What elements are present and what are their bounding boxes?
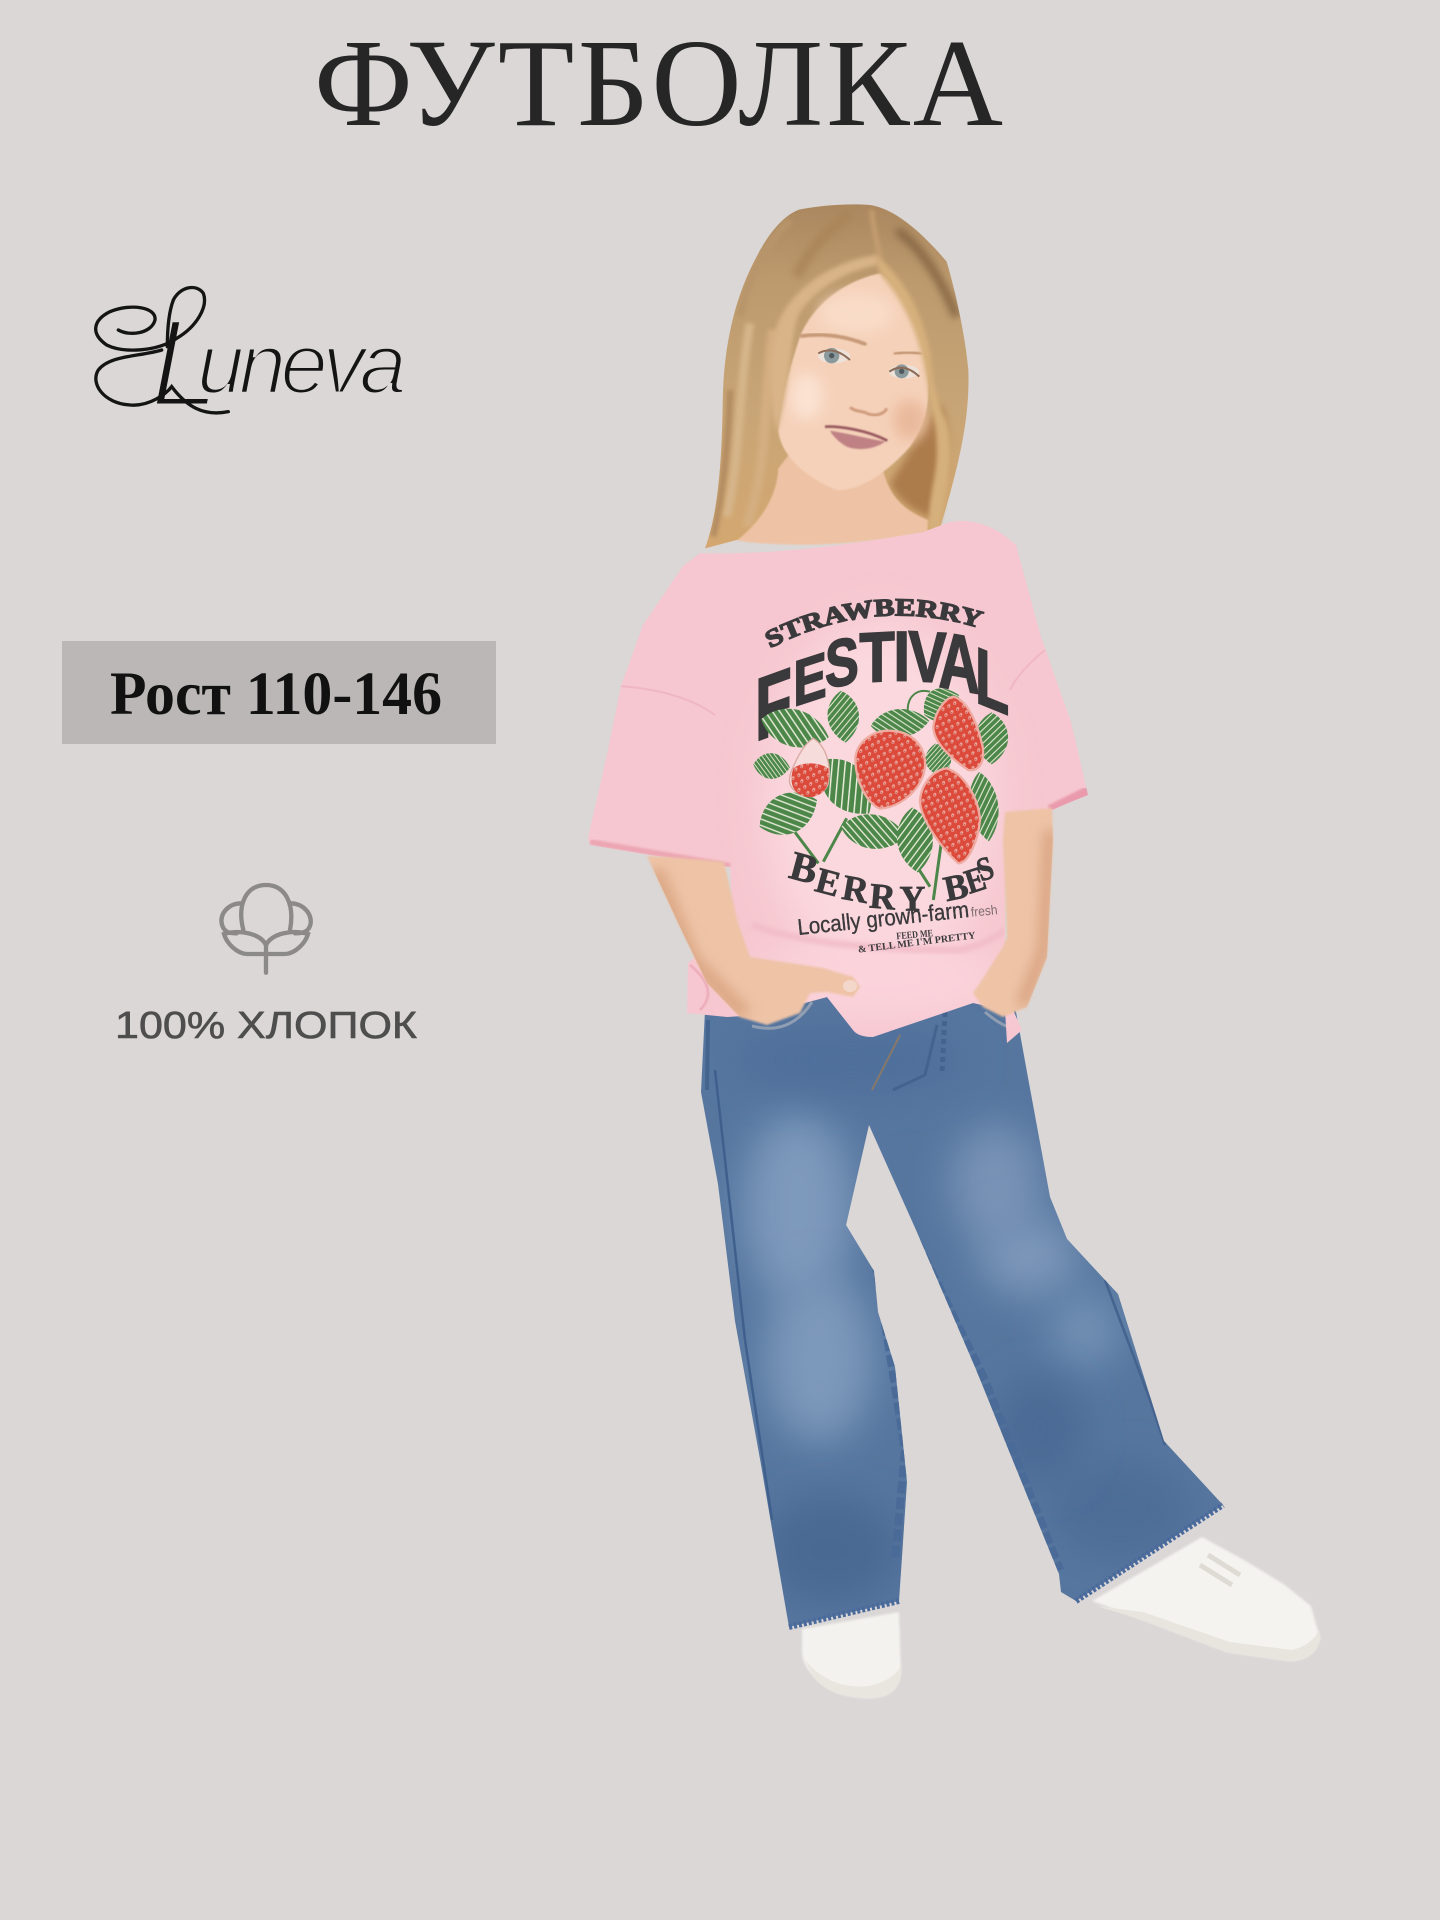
brand logo: uneva [197,317,404,412]
print heading: festival: T [859,616,895,698]
strawberry: upper right [933,697,983,770]
t-shirt print [753,598,1009,956]
hair front strands [770,255,951,532]
height badge [62,641,496,744]
material label: 100% ХЛОПОК [115,1005,417,1047]
print heading: festival: F [755,649,792,761]
print heading: festival: L [975,631,1009,734]
strawberry leaves [751,680,1008,874]
print tagline: Locally grown-farmfresh [796,893,998,940]
height badge: Рост 110-146 [110,661,442,728]
nose [850,407,887,415]
left eye [818,348,850,363]
brand logo: L [150,294,220,433]
print heading: festival: A [938,615,980,711]
t-shirt [588,521,1090,1043]
print heading: berry best: Y [899,879,925,919]
print small line one: FEED ME [896,928,934,942]
strawberry: large center [855,731,925,809]
print heading: festival: I [893,617,910,695]
print heading: strawberry: STRAWBERRY [765,598,985,648]
neck [737,453,928,545]
jeans seams [707,1002,1165,1570]
right eyebrow [895,352,921,354]
left shoe [802,1612,901,1698]
print heading: berry best: B [785,843,823,893]
icon: cotton boll [221,885,311,973]
child model photo illustration [588,204,1320,1698]
print heading: berry best: R [868,875,898,918]
print heading: berry best: S [972,848,998,889]
left arm and hand [647,856,860,1025]
strawberry: small left [789,738,829,797]
left eyebrow [802,335,865,344]
title: ФУТБОЛКА [314,15,1003,153]
print heading: festival: E [793,639,827,721]
print heading: berry best: R [839,867,873,911]
right shoe [1092,1537,1320,1661]
print heading: berry best [785,843,998,919]
strawberry: lower right [920,768,980,863]
print heading: festival: V [908,616,947,698]
vine stems [793,691,942,900]
print heading: festival [755,615,1009,761]
print small line two: & TELL ME I'M PRETTY [857,930,977,956]
print heading: berry best: B [940,865,972,909]
hair back [705,204,969,548]
print heading: berry best: E [960,858,990,901]
frayed hems [789,1505,1223,1627]
print heading: berry best: E [811,860,845,905]
mouth [825,427,887,449]
print heading: festival: S [825,622,859,703]
face [778,273,929,490]
brand logo [96,288,404,433]
jeans [701,990,1223,1627]
right arm and hand [973,808,1053,1017]
right eye [889,364,919,378]
infographic canvas [62,42,1320,1698]
